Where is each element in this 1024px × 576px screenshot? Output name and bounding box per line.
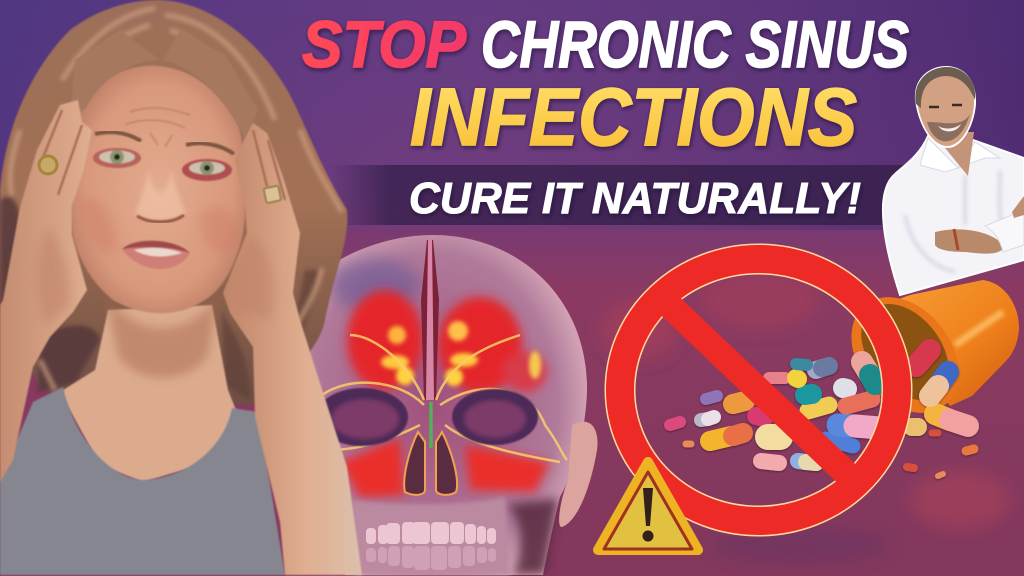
green midline: [429, 402, 433, 448]
eyes: [929, 105, 962, 107]
hair: [915, 67, 975, 108]
crossed forearm: [935, 229, 1005, 254]
warning triangle icon: [598, 462, 698, 550]
right palm shading: [238, 235, 274, 320]
illustration: skull with inflamed sinuses: [306, 235, 598, 575]
hair dark left: [0, 197, 100, 392]
nasal cavities: [404, 432, 425, 495]
prohibition sign: [620, 259, 897, 521]
bottle body: [877, 280, 1019, 406]
left ring: [39, 156, 57, 174]
face: [917, 69, 974, 146]
lower face: [352, 497, 510, 575]
right eyebrow: [186, 143, 234, 154]
hair back: [0, 0, 347, 405]
eye socket right: [452, 389, 538, 445]
left finger shadows: [40, 110, 82, 195]
forehead creases: [125, 108, 190, 147]
smile: [938, 124, 961, 131]
right eye: [182, 159, 232, 181]
bottle rim: [829, 276, 981, 434]
left eye: [93, 148, 141, 168]
subtitle: cure it naturally: CURE IT NATURALLY!: [409, 174, 861, 223]
eye socket inner right: [464, 400, 526, 438]
ear: [559, 422, 598, 527]
eye socket left: [316, 388, 408, 446]
hair bangs: [70, 30, 258, 140]
shirt shading: [905, 170, 1002, 272]
cheek flush: [80, 198, 238, 254]
title: stop chronic sinus: [302, 7, 909, 81]
eye socket inner left: [331, 399, 399, 439]
left arm and hand: [0, 100, 92, 482]
midline: [421, 240, 439, 400]
bottle highlight: [955, 312, 1003, 345]
nose: [135, 170, 186, 220]
shirt: [0, 387, 285, 575]
right arm and hand: [223, 123, 362, 575]
teeth lower: [366, 546, 496, 570]
bracelet: [954, 229, 958, 250]
hair highlights: [10, 8, 342, 390]
right ring: [263, 186, 281, 203]
hand: [1012, 196, 1024, 218]
neck and chest: [60, 305, 240, 482]
neck: [932, 132, 974, 176]
face: [72, 66, 246, 313]
title: stop chronic sinus: CHRONIC SINUS: [481, 7, 909, 81]
mouth: [122, 241, 190, 269]
hot spots: [381, 321, 541, 386]
right finger shadows: [253, 130, 285, 200]
sinus inflammation glow: [340, 290, 550, 498]
hair dark right lower: [222, 270, 320, 400]
title: stop chronic sinus: STOP: [302, 7, 467, 81]
bottle interior: [843, 287, 967, 417]
yellow nerve outlines: [322, 335, 567, 462]
forearm cuff: [985, 210, 1024, 252]
spilled pills: [670, 350, 974, 476]
pill bottle: [829, 276, 1019, 434]
neck shadow: [105, 290, 218, 378]
cranium shadow upper left: [330, 259, 420, 311]
nostril shadow: [137, 215, 184, 222]
head outline: [915, 66, 976, 148]
collar: [920, 138, 1000, 172]
teeth upper: [366, 522, 496, 544]
left eyebrow: [95, 132, 141, 141]
photo: woman with headache: [0, 0, 362, 575]
title: infections: INFECTIONS: [410, 72, 857, 163]
left palm shading: [38, 225, 70, 325]
cheek shadow: [505, 498, 558, 575]
presenter photo: [883, 66, 1024, 295]
shirt with white outline: [883, 136, 1024, 295]
title banner: [330, 165, 920, 225]
beard: [927, 114, 970, 141]
